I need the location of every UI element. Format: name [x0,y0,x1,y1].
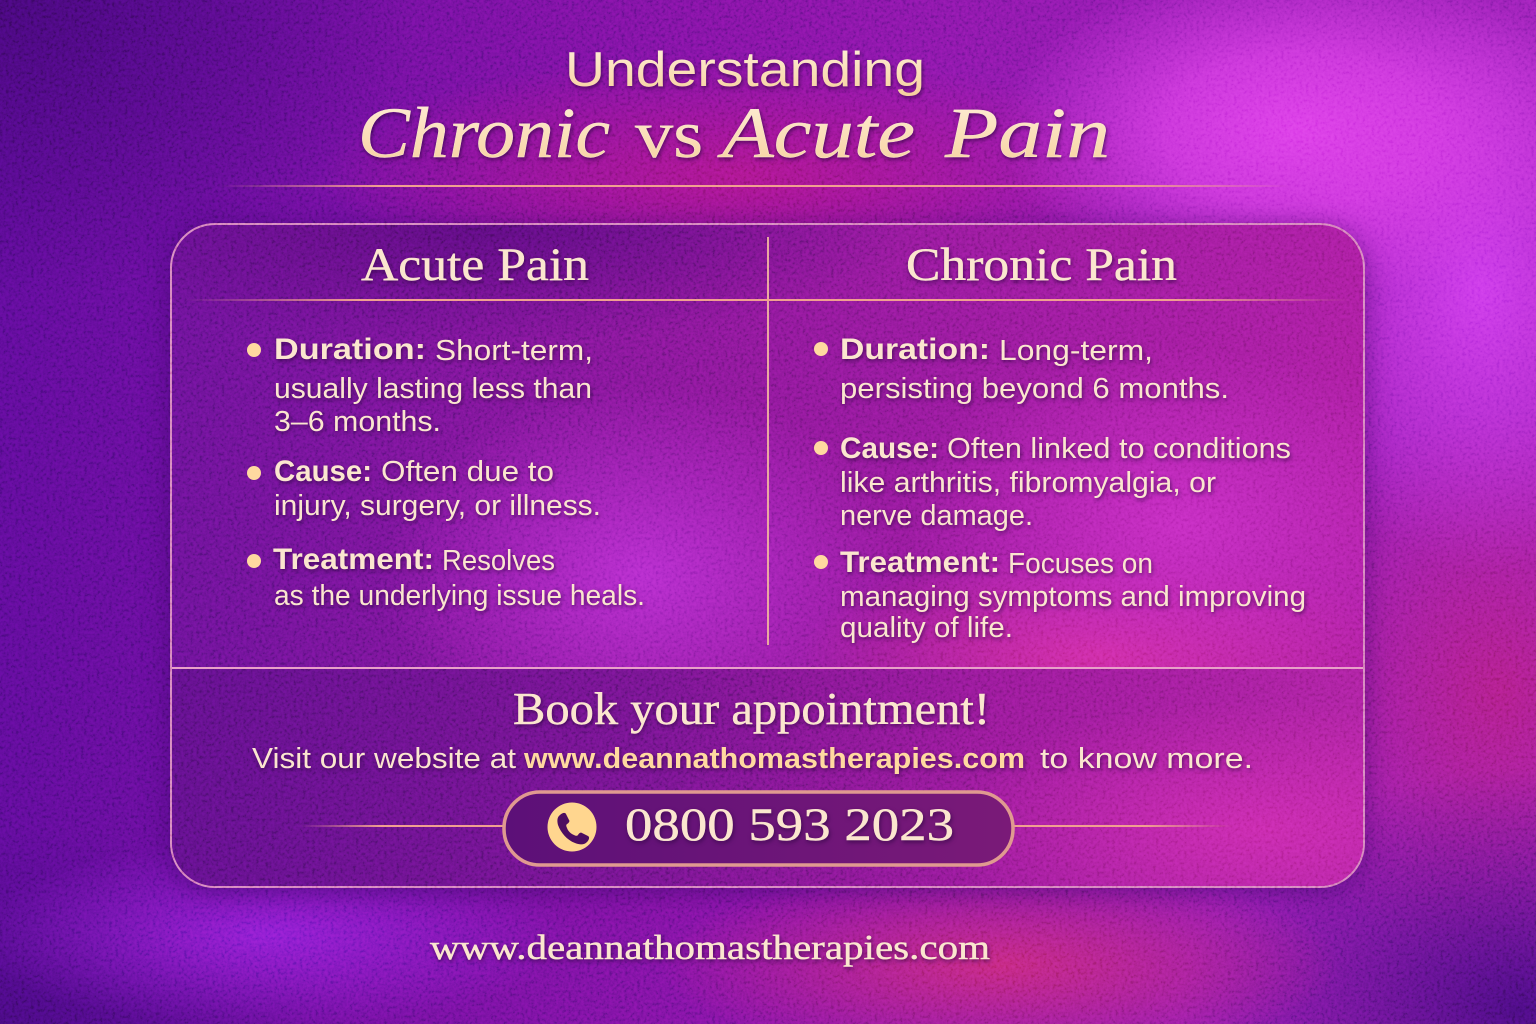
bullet: chronic duration [814,333,1229,405]
bullet: chronic cause: like arthritis, fibromyalgia, or [840,467,1216,499]
heading: Acute Pain: Acute Pain [361,239,589,291]
bullet: chronic cause: nerve damage. [840,500,1033,532]
title [358,43,1110,173]
text: website invitation [252,743,1253,775]
title line: Chronic vs Acute Pain: Pain [944,93,1110,173]
bullet: chronic duration: Duration: [840,333,990,366]
heading: Book your appointment: Book your appointment! [513,683,990,734]
bullet: acute treatment [247,543,645,612]
bullet: acute duration: Short-term, [435,335,593,367]
bullet: chronic duration: Long-term, [999,335,1153,367]
bullet: chronic treatment: Focuses on [1008,548,1153,580]
column divider [767,237,769,645]
panel: chronic pain bullets [814,333,1306,644]
bullet: chronic treatment: quality of life. [840,612,1013,644]
text: website invitation: Visit our website at [252,743,516,775]
panel: comparison card [170,223,1365,888]
bullet: chronic cause: Cause: [840,432,939,465]
text: website invitation: www.deannathomastherapies.com [523,743,1025,775]
text: website invitation: to know more. [1040,743,1253,775]
title line: Understanding: Understanding [565,43,925,97]
phone connector left [300,825,504,827]
bullet: chronic treatment: managing symptoms and improving [840,581,1306,613]
bullet: acute treatment: as the underlying issue heals. [274,580,645,612]
bullet: acute treatment: Treatment: [273,543,434,576]
panel: booking footer band [172,669,1363,886]
title line: Chronic vs Acute Pain: vs [635,96,703,172]
bullet: chronic cause [814,432,1291,532]
heading: Chronic Pain: Chronic Pain [906,239,1177,291]
bullet: acute cause: injury, surgery, or illness. [274,490,601,522]
text: footer website: www.deannathomastherapies.com [430,928,990,967]
bullet: acute cause: Often due to [381,456,554,488]
panel: acute pain bullets [247,333,645,612]
header divider [185,299,1350,301]
title underline [220,185,1290,187]
bullet: acute treatment: Resolves [442,545,555,577]
phone connector right [1013,825,1233,827]
footer divider [172,667,1363,669]
bullet: acute cause [247,455,601,522]
title line: Chronic vs Acute Pain: Acute [717,93,915,173]
bullet: chronic treatment [814,546,1306,644]
bullet: acute cause: Cause: [274,455,372,488]
bullet: acute duration: usually lasting less than [274,373,592,405]
icon: phone [548,802,596,852]
bullet: acute duration: 3–6 months. [274,406,441,438]
bullet: chronic treatment: Treatment: [840,546,1000,579]
title line: Chronic vs Acute Pain [358,93,1110,173]
phone pill [504,792,1013,865]
bullet: chronic cause: Often linked to conditions [947,433,1291,465]
title line: Chronic vs Acute Pain: Chronic [358,93,610,173]
bullet: acute duration: Duration: [274,333,426,366]
phone number: 0800 593 2023 [625,799,954,851]
bullet: chronic duration: persisting beyond 6 months. [840,373,1229,405]
bullet: acute duration [247,333,593,438]
